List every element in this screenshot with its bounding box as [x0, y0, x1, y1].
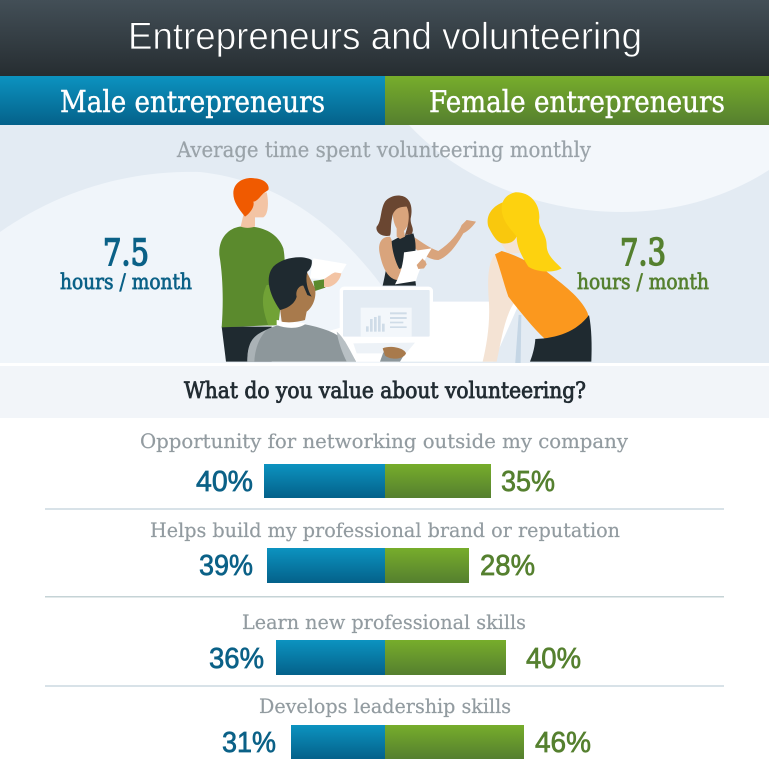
row: skills: 40%	[526, 643, 581, 675]
illustration: team around a laptop	[219, 178, 592, 362]
row: networking: 40%	[196, 466, 253, 498]
row: skills	[209, 610, 581, 675]
header: male entrepreneurs: Male entrepreneurs	[60, 85, 325, 120]
stat: female hours	[577, 233, 709, 294]
figure: standing man	[219, 178, 347, 362]
stat: male hours	[60, 233, 192, 294]
stat: male hours: 7.5	[103, 233, 149, 274]
row: leadership: 31%	[222, 727, 276, 759]
stat: female hours: 7.3	[620, 233, 666, 274]
row: brand: 28%	[480, 550, 535, 582]
figure: seated man	[247, 257, 356, 362]
row: networking: 35%	[501, 466, 555, 498]
header: female entrepreneurs	[385, 76, 769, 125]
row: skills: 36%	[209, 643, 264, 675]
row: networking	[140, 429, 629, 498]
title banner	[0, 0, 769, 76]
title: Entrepreneurs and volunteering	[128, 16, 642, 58]
subheading: average time: Average time spent volunteering monthly	[176, 138, 591, 162]
row: leadership	[222, 694, 591, 759]
stat: male hours: hours / month	[60, 270, 192, 294]
row: brand: Helps build my professional brand or reputation	[150, 518, 620, 542]
band: question: What do you value about volunteering?	[184, 379, 586, 404]
row: leadership: 46%	[535, 727, 591, 759]
panel: average time volunteering background	[0, 125, 769, 363]
stat: female hours: hours / month	[577, 270, 709, 294]
figure: leaning woman	[483, 192, 592, 362]
icon: laptop with chart	[341, 288, 432, 362]
header: male entrepreneurs	[0, 76, 385, 125]
row: leadership: Develops leadership skills	[259, 694, 511, 718]
row: brand	[150, 518, 620, 583]
row: networking: Opportunity for networking outside my company	[140, 429, 629, 453]
row: brand: 39%	[199, 550, 253, 582]
band: question	[0, 366, 769, 418]
table	[327, 302, 520, 362]
figure: presenting woman	[376, 196, 476, 286]
header: female entrepreneurs: Female entrepreneurs	[429, 85, 725, 120]
row: skills: Learn new professional skills	[242, 610, 526, 634]
